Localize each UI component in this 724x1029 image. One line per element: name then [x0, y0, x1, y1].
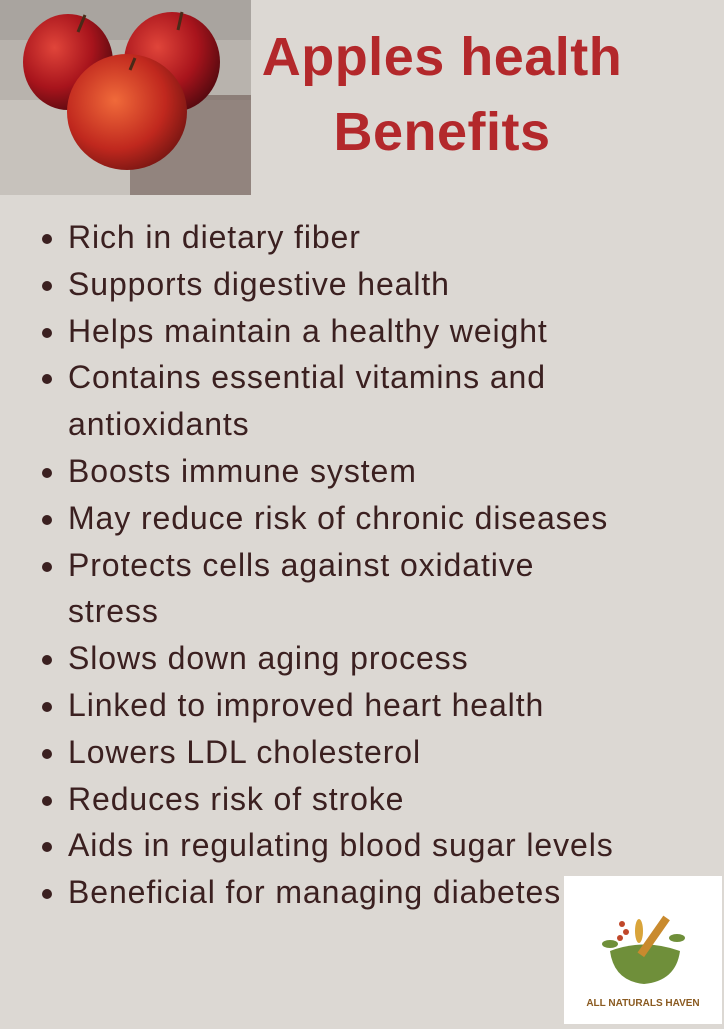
benefits list — [42, 219, 614, 910]
title: Benefits — [333, 102, 551, 162]
benefits list: Slows down aging process — [68, 640, 468, 676]
benefits list: Boosts immune system — [68, 453, 417, 489]
benefits list: Protects cells against oxidative stress — [68, 547, 534, 629]
benefits list: May reduce risk of chronic diseases — [68, 500, 608, 536]
benefits list: Lowers LDL cholesterol — [68, 734, 421, 770]
title — [262, 27, 622, 162]
photo: apples — [0, 0, 251, 195]
benefits list: Reduces risk of stroke — [68, 781, 404, 817]
benefits list: Supports digestive health — [68, 266, 450, 302]
benefits list: Aids in regulating blood sugar levels — [68, 827, 614, 863]
title: Apples health — [262, 27, 622, 87]
icon: mortar bowl — [602, 916, 685, 984]
benefits list: Linked to improved heart health — [68, 687, 544, 723]
benefits list: Contains essential vitamins and antioxidants — [68, 359, 546, 442]
logo — [564, 876, 722, 1024]
benefits list: Rich in dietary fiber — [68, 219, 361, 255]
logo text: ALL NATURALS HAVEN — [586, 998, 700, 1009]
benefits list: Beneficial for managing diabetes — [68, 874, 561, 910]
benefits list: Helps maintain a healthy weight — [68, 313, 548, 349]
